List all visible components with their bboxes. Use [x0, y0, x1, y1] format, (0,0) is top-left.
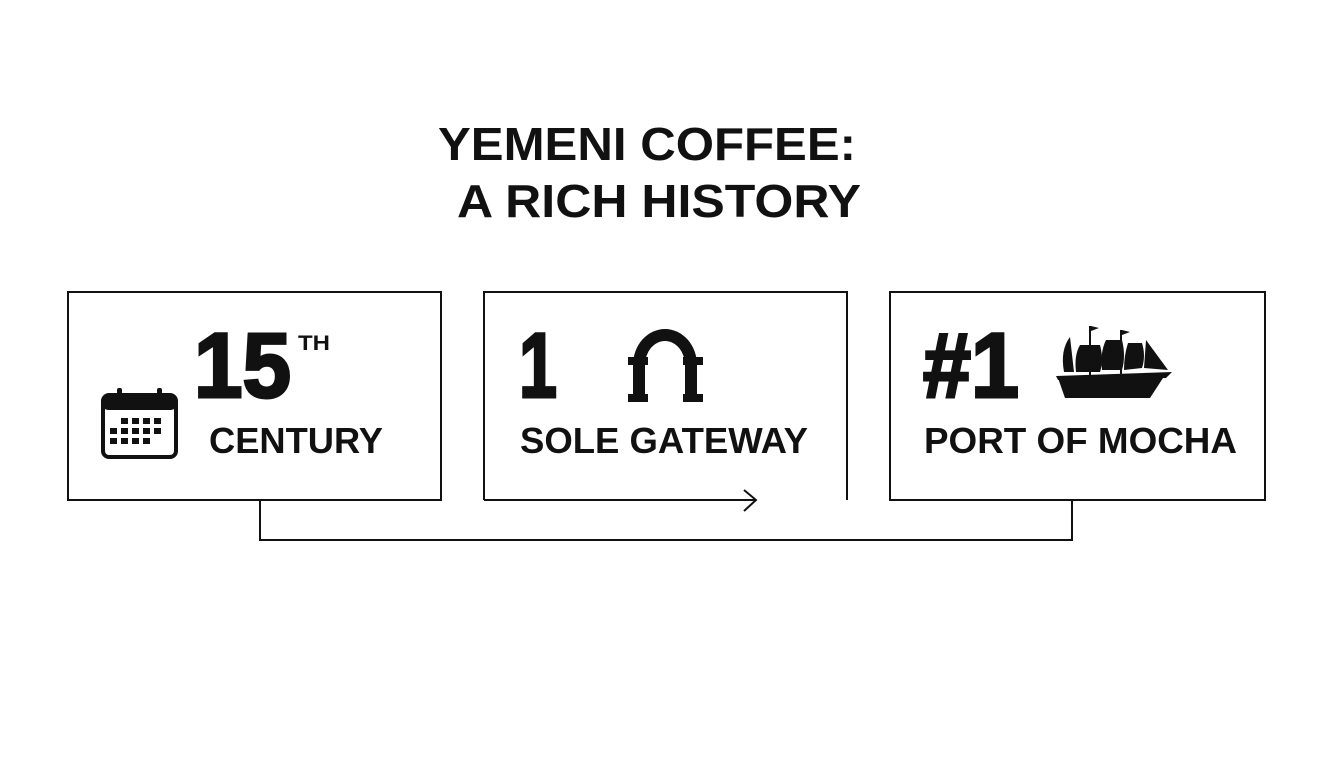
title: YEMENI COFFEE:	[438, 118, 856, 170]
title	[438, 118, 861, 227]
label: sole gateway: SOLE GATEWAY	[520, 420, 808, 461]
big number 15th: TH	[298, 332, 330, 355]
panel: 15th century	[68, 292, 441, 500]
number 1: 1	[519, 315, 557, 417]
label: port of mocha: PORT OF MOCHA	[924, 420, 1237, 461]
icon: arch	[628, 329, 703, 402]
number #1: #1	[923, 315, 1019, 417]
label: century: CENTURY	[209, 420, 383, 461]
panel: sole gateway	[484, 292, 847, 511]
panel: port of mocha	[890, 292, 1265, 500]
big number 15th: 15	[194, 315, 291, 417]
icon: ship	[1056, 326, 1172, 398]
connector arrow	[260, 500, 1072, 540]
icon: calendar	[103, 388, 176, 457]
title: A RICH HISTORY	[457, 175, 861, 227]
